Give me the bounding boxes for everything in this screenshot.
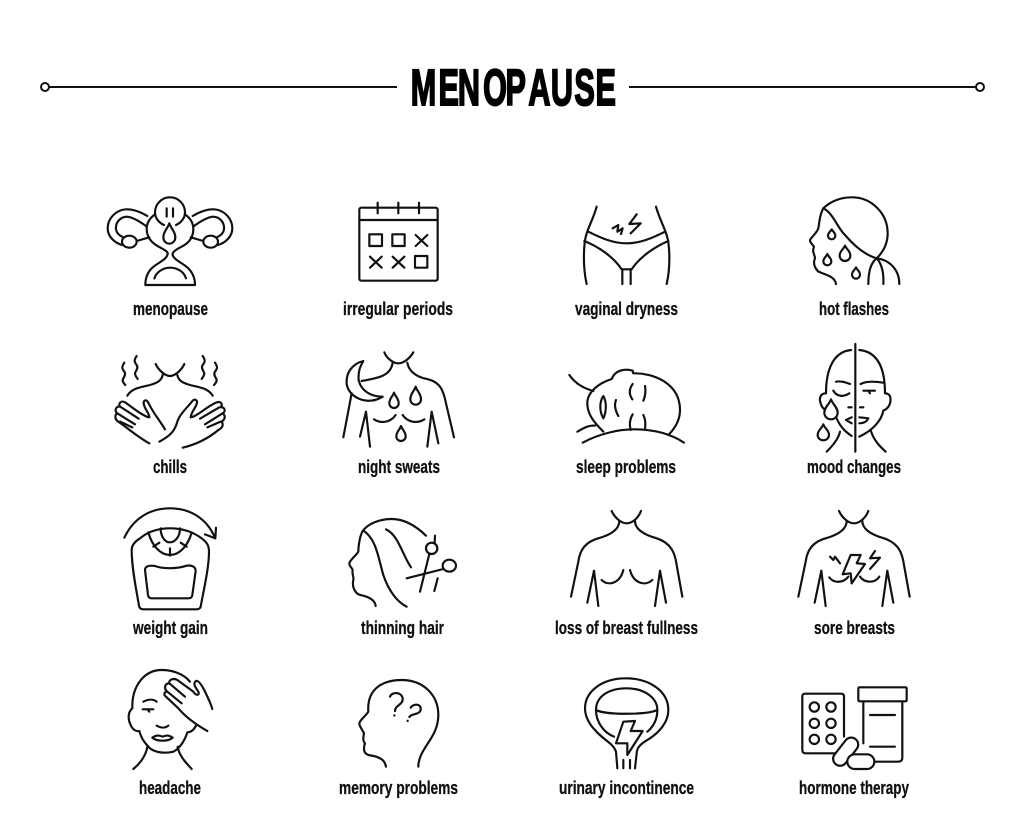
panel: weight gain <box>124 508 216 638</box>
label: weight gain <box>132 618 208 638</box>
icon: bladder with lightning <box>585 678 668 768</box>
label: headache <box>139 778 201 798</box>
icon: sweating head <box>810 197 899 284</box>
panel: sore breasts <box>798 511 910 638</box>
panel: irregular periods <box>343 203 453 319</box>
label: urinary incontinence <box>559 778 694 798</box>
panel: sleep problems <box>569 370 684 477</box>
label: thinning hair <box>361 618 444 638</box>
label: hot flashes <box>819 299 889 319</box>
icon: pelvis with zaps <box>584 207 669 284</box>
icon: torso with lightning <box>798 511 910 606</box>
label: sleep problems <box>576 457 676 477</box>
icon: calendar <box>359 203 438 281</box>
panel: loss of breast fullness <box>555 511 698 638</box>
label: mood changes <box>807 457 901 477</box>
panel: hot flashes <box>810 197 899 319</box>
icon: torso with moon and drops <box>343 352 454 447</box>
icon: crossed hands on shoulders <box>115 356 225 448</box>
title banner <box>41 59 984 116</box>
panel: memory problems <box>339 680 458 798</box>
panel: mood changes <box>807 344 901 477</box>
icon: sleeping head <box>569 370 684 443</box>
label: hormone therapy <box>799 778 909 798</box>
panel: chills <box>115 356 225 477</box>
panel: urinary incontinence <box>559 678 694 798</box>
label: memory problems <box>339 778 458 798</box>
label: vaginal dryness <box>575 299 678 319</box>
icon: head with question marks <box>359 680 438 767</box>
panel: vaginal dryness <box>575 207 678 319</box>
icon: flat chest torso <box>571 511 682 606</box>
label: sore breasts <box>814 618 895 638</box>
panel: menopause <box>108 197 232 319</box>
icon: head with scissors <box>349 519 456 607</box>
label: irregular periods <box>343 299 453 319</box>
right title rule <box>629 83 984 91</box>
panel: thinning hair <box>349 519 456 638</box>
icon: head with hand on forehead <box>129 670 212 769</box>
label: chills <box>153 457 187 477</box>
label: night sweats <box>358 457 440 477</box>
icon: split face with tears <box>818 344 891 452</box>
panel: headache <box>129 670 212 798</box>
icon: uterus <box>108 197 232 285</box>
label: loss of breast fullness <box>555 618 698 638</box>
icon: pills and bottle <box>802 687 907 769</box>
label: menopause <box>133 299 208 319</box>
title: MENOPAUSE <box>411 59 616 116</box>
panel: hormone therapy <box>799 687 909 798</box>
left title rule <box>41 83 397 91</box>
icon: scale with arrow <box>124 508 216 609</box>
panel: night sweats <box>343 352 454 477</box>
